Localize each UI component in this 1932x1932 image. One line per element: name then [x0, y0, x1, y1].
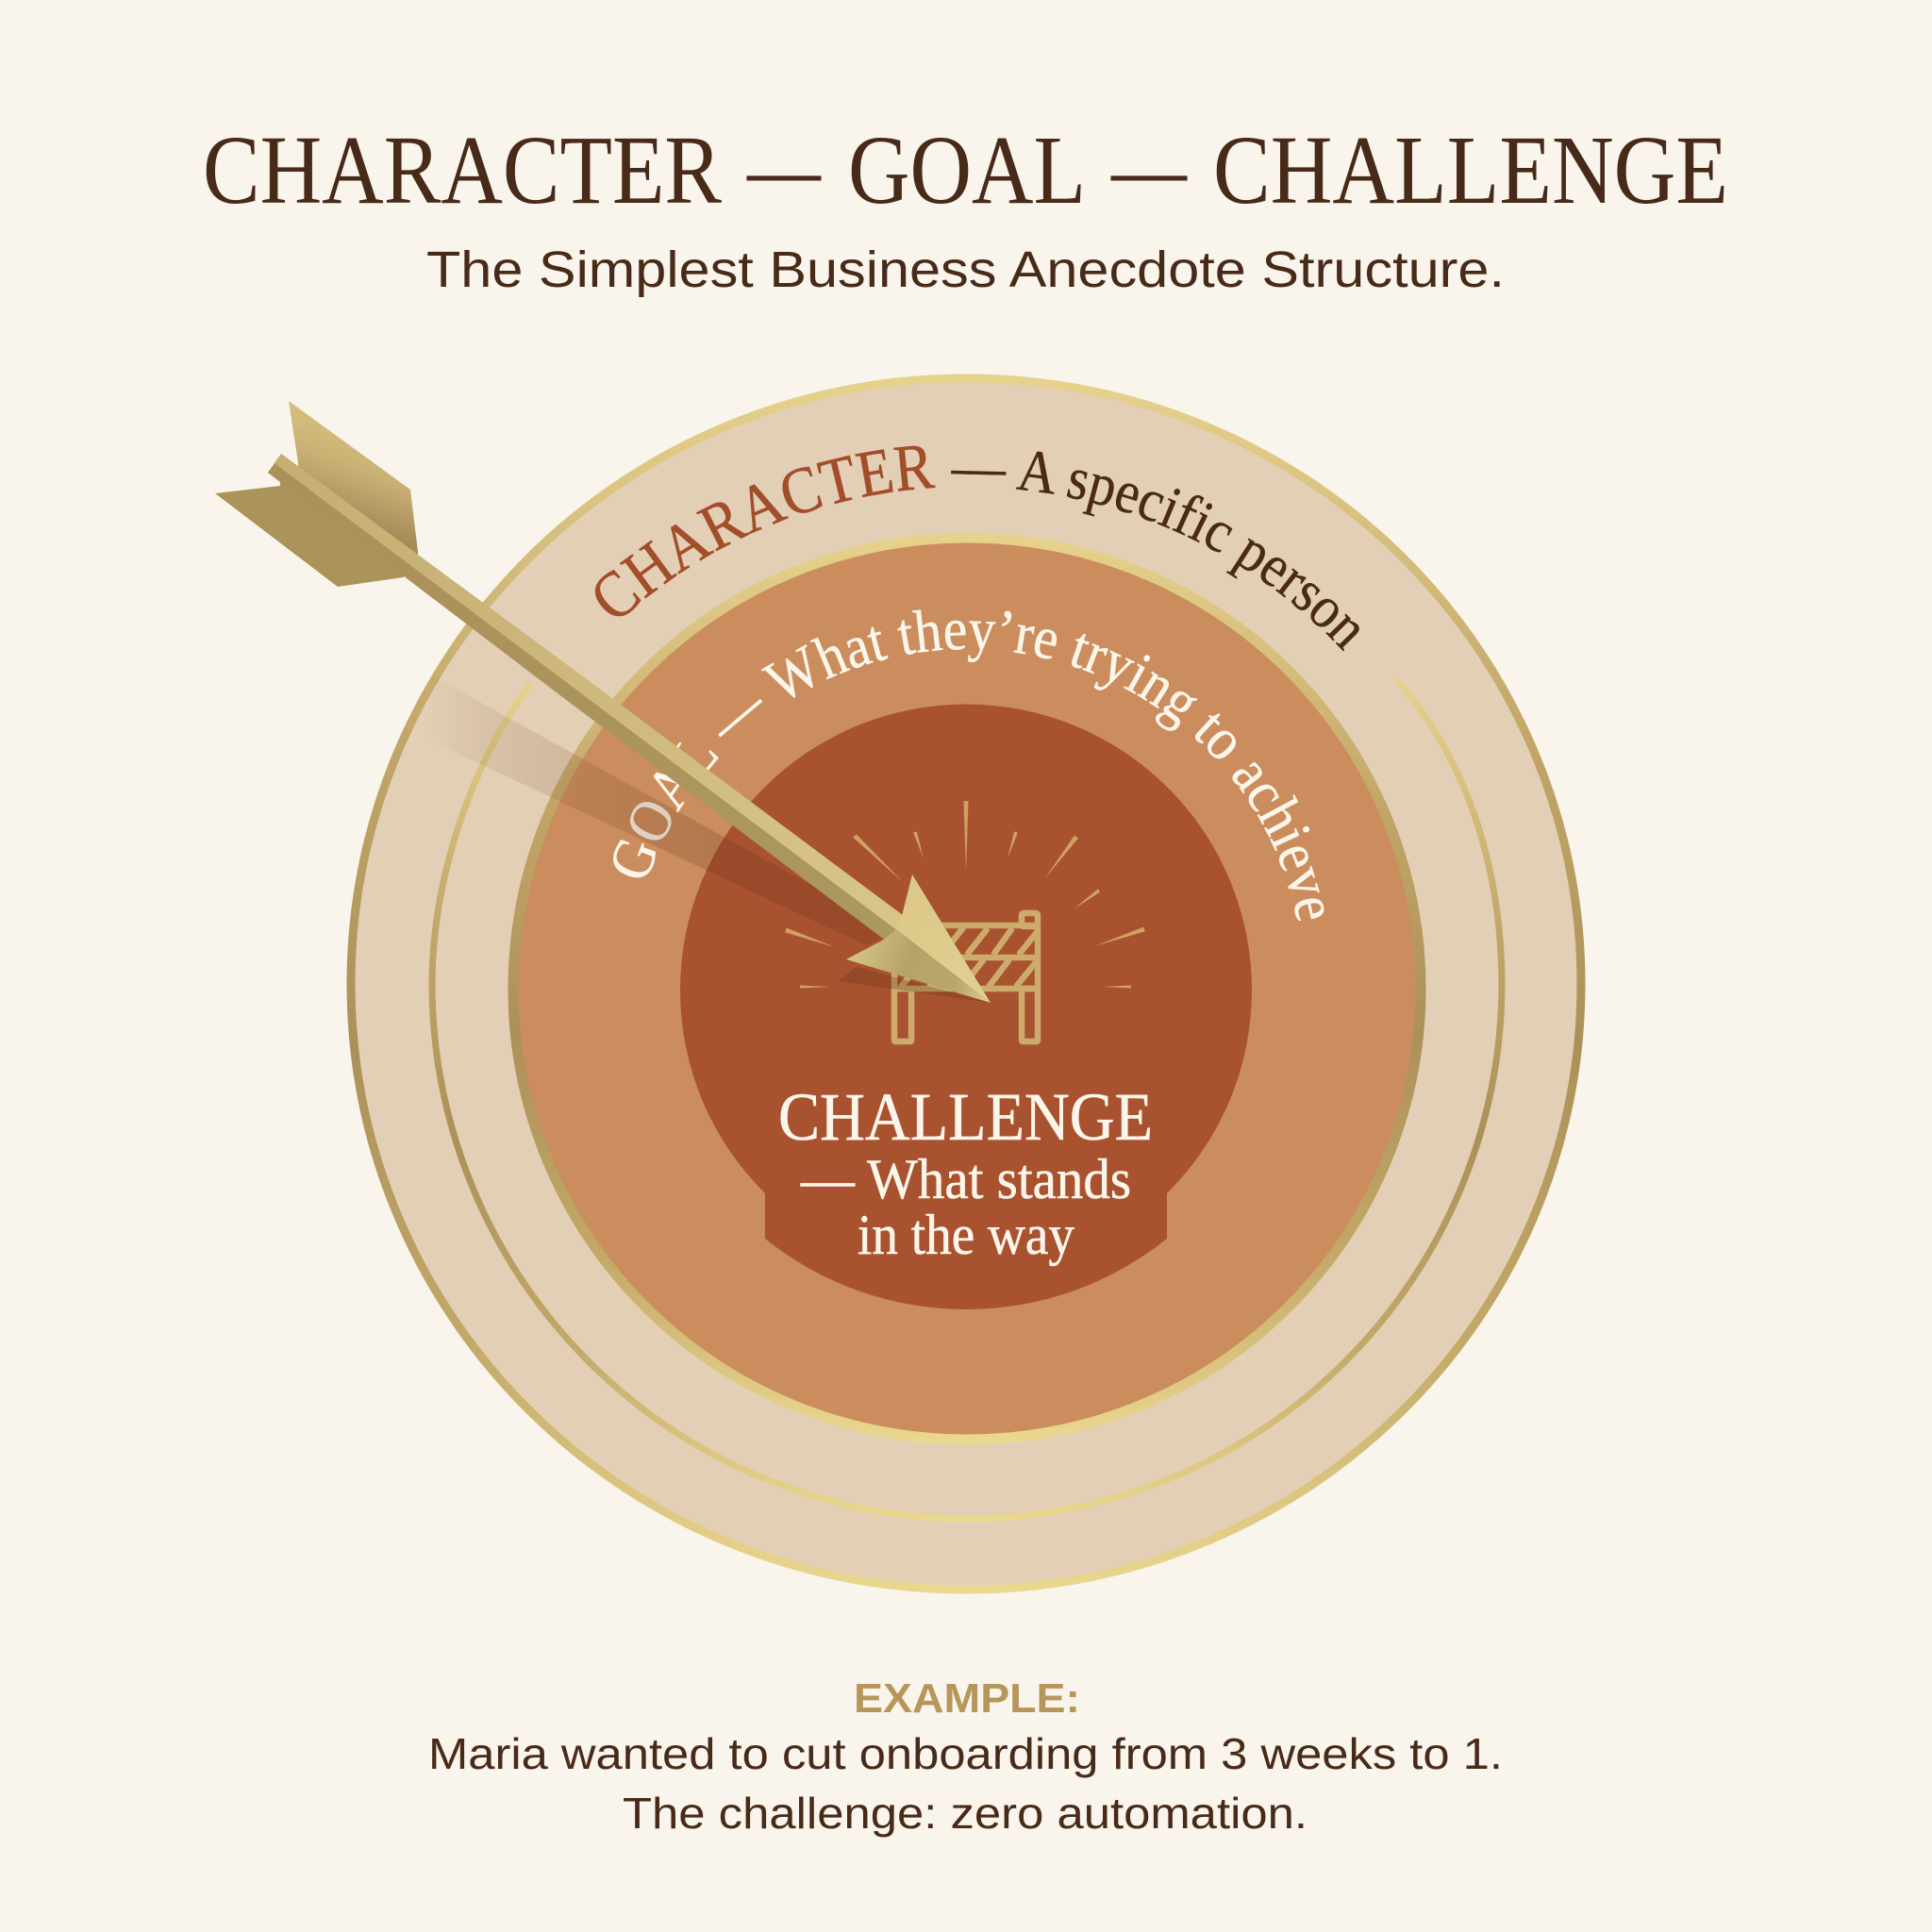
title: —: [1110, 114, 1188, 223]
impact rays: [785, 801, 1145, 989]
label: challenge: in the way: [858, 1204, 1074, 1266]
title: CHALLENGE: [1213, 116, 1728, 225]
label: challenge: — What stands: [800, 1148, 1131, 1210]
example text block: The challenge: zero automation.: [623, 1789, 1307, 1838]
subtitle: The Simplest Business Anecdote Structure.: [426, 242, 1505, 298]
ring: goal (middle): [513, 538, 1421, 1440]
arrowhead: [846, 874, 991, 1003]
title: [203, 114, 1728, 225]
ring: character (outer): [351, 378, 1581, 1590]
example text block: EXAMPLE:: [854, 1675, 1080, 1722]
label: challenge: CHALLENGE: [778, 1079, 1153, 1155]
example text block: [428, 1675, 1503, 1838]
label: a specific person: — A specific person: [951, 451, 1359, 651]
label: goal: GOAL — What they’re trying to achieve: [613, 609, 1324, 921]
example text block: Maria wanted to cut onboarding from 3 weeks to 1.: [428, 1729, 1503, 1778]
label: character: CHARACTER: [594, 445, 936, 617]
label: challenge: [778, 1079, 1153, 1266]
arrow shadow: [428, 674, 991, 1003]
target diagram: [347, 374, 1585, 1594]
barrier: [894, 913, 1038, 1041]
shaft: [268, 455, 906, 941]
arrow: [215, 401, 991, 1003]
icon: barrier with rays: [785, 801, 1145, 1041]
circle: challenge (centre): [680, 705, 1252, 1309]
title: CHARACTER: [203, 116, 723, 225]
thin gold ring: [432, 679, 1502, 1519]
fletching: [215, 401, 418, 587]
title: —: [746, 114, 822, 223]
title: GOAL: [848, 116, 1086, 225]
